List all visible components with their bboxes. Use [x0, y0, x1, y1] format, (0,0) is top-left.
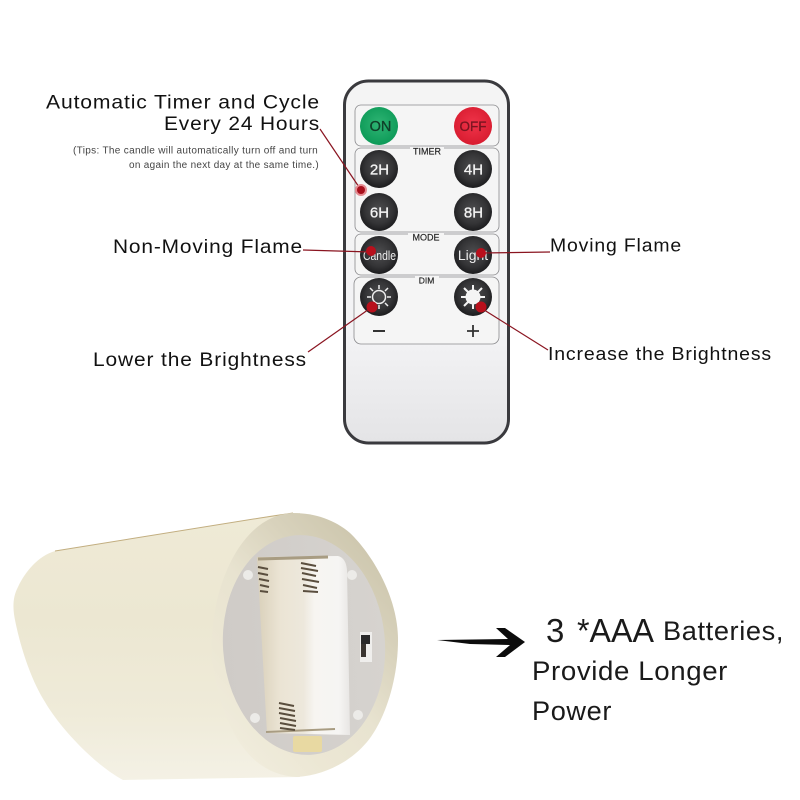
button: 6H — [360, 193, 398, 231]
yellow tab — [293, 736, 322, 752]
button: 2H: 2H — [370, 162, 389, 178]
tips text — [73, 146, 319, 171]
screw posts — [243, 570, 363, 723]
label: increase brightness: Increase the Brightness — [548, 343, 772, 364]
button: on — [360, 107, 398, 145]
callout lines — [303, 129, 550, 352]
minus sign — [373, 330, 385, 332]
springs — [258, 563, 319, 730]
panel: power — [355, 105, 499, 146]
battery compartment — [257, 556, 350, 735]
label: timer — [46, 92, 320, 135]
battery cover — [216, 530, 392, 760]
button: lower brightness — [360, 278, 398, 316]
battery text: Batteries, — [663, 616, 784, 646]
remote control — [344, 81, 508, 443]
battery text: Provide Longer — [532, 656, 728, 686]
label: moving flame: Moving Flame — [550, 234, 682, 256]
candle top edge — [55, 513, 293, 551]
button: 8H: 8H — [464, 204, 483, 222]
button: 4H: 4H — [464, 162, 483, 178]
callout dots — [355, 184, 486, 312]
label: lower brightness: Lower the Brightness — [93, 350, 307, 371]
candle rim — [212, 513, 398, 777]
button: candle: Candle — [363, 248, 396, 263]
panel: mode — [355, 232, 499, 275]
arrow — [437, 628, 525, 657]
button: on: ON — [370, 119, 391, 135]
plus sign — [467, 325, 479, 337]
tips text: on again the next day at the same time.) — [129, 160, 319, 171]
button: 4H — [454, 150, 492, 188]
button: light — [454, 236, 492, 274]
panel: timer: TIMER — [413, 146, 441, 156]
panel: mode: MODE — [412, 232, 440, 242]
button: off: OFF — [460, 119, 486, 134]
label: timer: Every 24 Hours — [164, 113, 320, 135]
label: non-moving flame: Non-Moving Flame — [113, 236, 303, 258]
slide switch — [360, 632, 372, 662]
button: raise brightness — [454, 278, 492, 316]
battery text: Power — [532, 696, 612, 726]
battery text: 3 — [546, 612, 564, 649]
button: off — [454, 107, 492, 145]
battery text: *AAA — [577, 612, 654, 649]
button: light: Light — [458, 247, 488, 263]
candle body — [13, 513, 300, 780]
button: 2H — [360, 150, 398, 188]
panel: dim — [354, 276, 499, 344]
panel: dim: DIM — [419, 276, 434, 286]
button: 8H — [454, 193, 492, 231]
button: candle — [360, 236, 398, 274]
button: 6H: 6H — [370, 204, 389, 222]
label: timer: Automatic Timer and Cycle — [46, 92, 320, 114]
panel: timer — [355, 146, 499, 232]
tips text: (Tips: The candle will automatically turn off and turn — [73, 146, 318, 156]
candle base photo — [13, 513, 398, 780]
battery text — [532, 612, 784, 726]
